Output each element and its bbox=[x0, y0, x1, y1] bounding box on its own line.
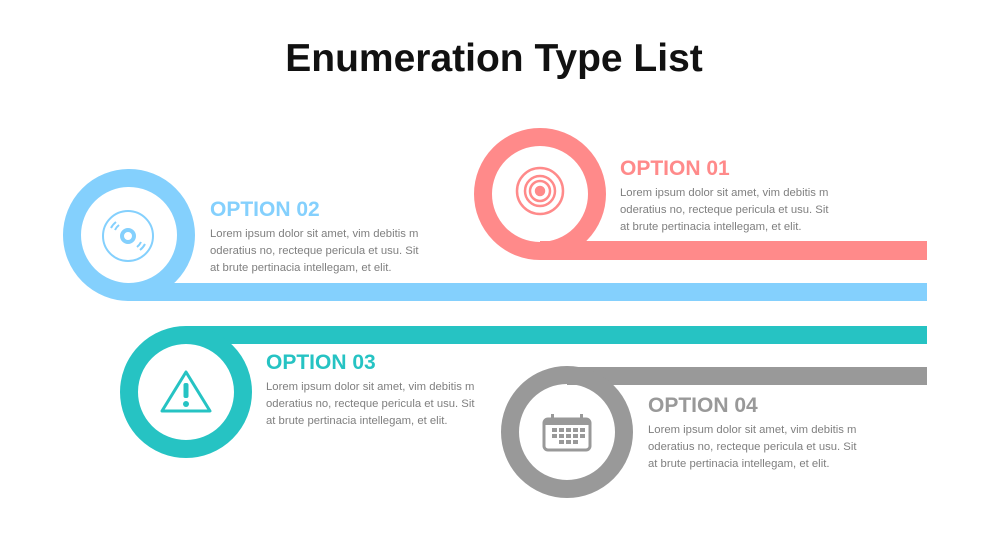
text: option 03: Lorem ipsum dolor sit amet, vim debitis m bbox=[266, 381, 474, 393]
band+circle: option 04 bbox=[510, 367, 927, 489]
text: option 02: Lorem ipsum dolor sit amet, vim debitis m bbox=[210, 228, 418, 240]
text: option 02 bbox=[210, 198, 418, 274]
text: option 01: at brute pertinacia intellegam, et elit. bbox=[620, 221, 801, 233]
text: option 02: at brute pertinacia intellegam, et elit. bbox=[210, 262, 391, 274]
text: option 02: oderatius no, recteque pericula et usu. Sit bbox=[210, 245, 418, 257]
text: option 04: Lorem ipsum dolor sit amet, vim debitis m bbox=[648, 424, 856, 436]
text: option 01: OPTION 01 bbox=[620, 157, 730, 180]
band+circle: option 01 bbox=[483, 137, 927, 260]
text: option 01 bbox=[620, 157, 828, 233]
icon: calendar bbox=[544, 414, 590, 450]
band+circle: option 02 bbox=[72, 178, 927, 301]
band+circle: option 03 bbox=[129, 326, 927, 449]
text: option 04 bbox=[648, 394, 856, 470]
text: option 02: OPTION 02 bbox=[210, 198, 320, 221]
icon: target bbox=[517, 168, 563, 214]
text: option 04: OPTION 04 bbox=[648, 394, 758, 417]
text: option 04: oderatius no, recteque pericula et usu. Sit bbox=[648, 441, 856, 453]
text: option 03: oderatius no, recteque pericula et usu. Sit bbox=[266, 398, 474, 410]
text: option 01: oderatius no, recteque pericula et usu. Sit bbox=[620, 204, 828, 216]
text: option 03 bbox=[266, 351, 474, 427]
title: Enumeration Type List bbox=[285, 37, 703, 80]
text: option 01: Lorem ipsum dolor sit amet, vim debitis m bbox=[620, 187, 828, 199]
text: option 04: at brute pertinacia intellegam, et elit. bbox=[648, 458, 829, 470]
icon: disc bbox=[103, 211, 153, 261]
text: option 03: OPTION 03 bbox=[266, 351, 376, 374]
text: option 03: at brute pertinacia intellegam, et elit. bbox=[266, 415, 447, 427]
icon: warning bbox=[162, 372, 210, 411]
